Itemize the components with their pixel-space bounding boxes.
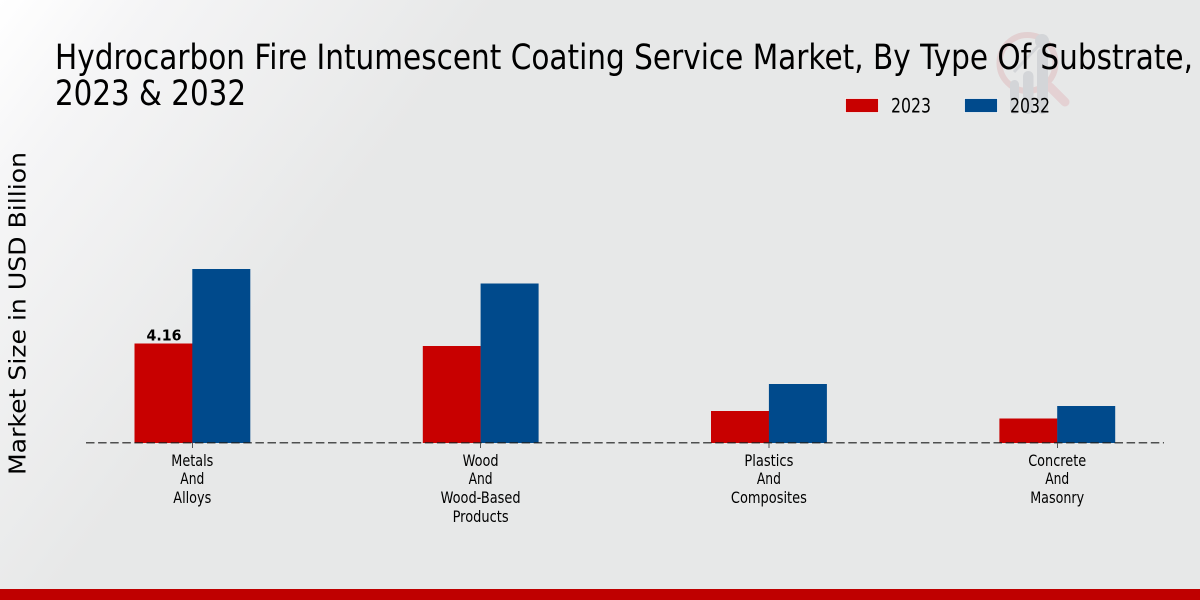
title: 2023 & 2032 bbox=[55, 74, 246, 114]
category label: Plastics And Composites: Plastics bbox=[744, 451, 793, 470]
category label: Metals And Alloys: And bbox=[180, 469, 204, 488]
y-axis label: Market Size in USD Billion bbox=[6, 152, 32, 475]
category label: Plastics And Composites: Composites bbox=[731, 488, 807, 507]
category label: Wood And Wood-Based Products: Wood bbox=[463, 451, 499, 470]
icon: watermark logo bbox=[1000, 34, 1065, 114]
category label: Wood And Wood-Based Products bbox=[441, 451, 521, 526]
category label: Wood And Wood-Based Products: Wood-Based bbox=[441, 488, 521, 507]
group: Concrete And Masonry bbox=[999, 406, 1115, 443]
category label: Wood And Wood-Based Products: And bbox=[469, 469, 493, 488]
category label: Concrete And Masonry: Masonry bbox=[1030, 488, 1084, 507]
group: Plastics And Composites bbox=[711, 384, 827, 443]
legend bbox=[846, 94, 1050, 118]
category label: Metals And Alloys bbox=[171, 451, 213, 507]
data label: 4.16 bbox=[146, 326, 182, 344]
group: Wood And Wood-Based Products bbox=[423, 284, 539, 443]
legend item: 2032 bbox=[964, 94, 1050, 118]
category label: Plastics And Composites: And bbox=[757, 469, 781, 488]
bar chart bbox=[134, 269, 1115, 443]
x-axis baseline bbox=[86, 443, 1164, 448]
legend item: 2023: 2023 bbox=[891, 94, 931, 118]
group: Metals And Alloys bbox=[134, 269, 250, 443]
category label: Plastics And Composites bbox=[731, 451, 807, 507]
title bbox=[55, 38, 1193, 114]
category label: Concrete And Masonry: And bbox=[1045, 469, 1069, 488]
category label: Wood And Wood-Based Products: Products bbox=[453, 507, 509, 526]
category label: Metals And Alloys: Alloys bbox=[173, 488, 211, 507]
category label: Metals And Alloys: Metals bbox=[171, 451, 213, 470]
footer bar bbox=[0, 589, 1200, 600]
category label: Concrete And Masonry bbox=[1028, 451, 1086, 507]
legend item: 2023 bbox=[846, 94, 931, 118]
legend item: 2032: 2032 bbox=[1010, 94, 1050, 118]
category label: Concrete And Masonry: Concrete bbox=[1028, 451, 1086, 470]
